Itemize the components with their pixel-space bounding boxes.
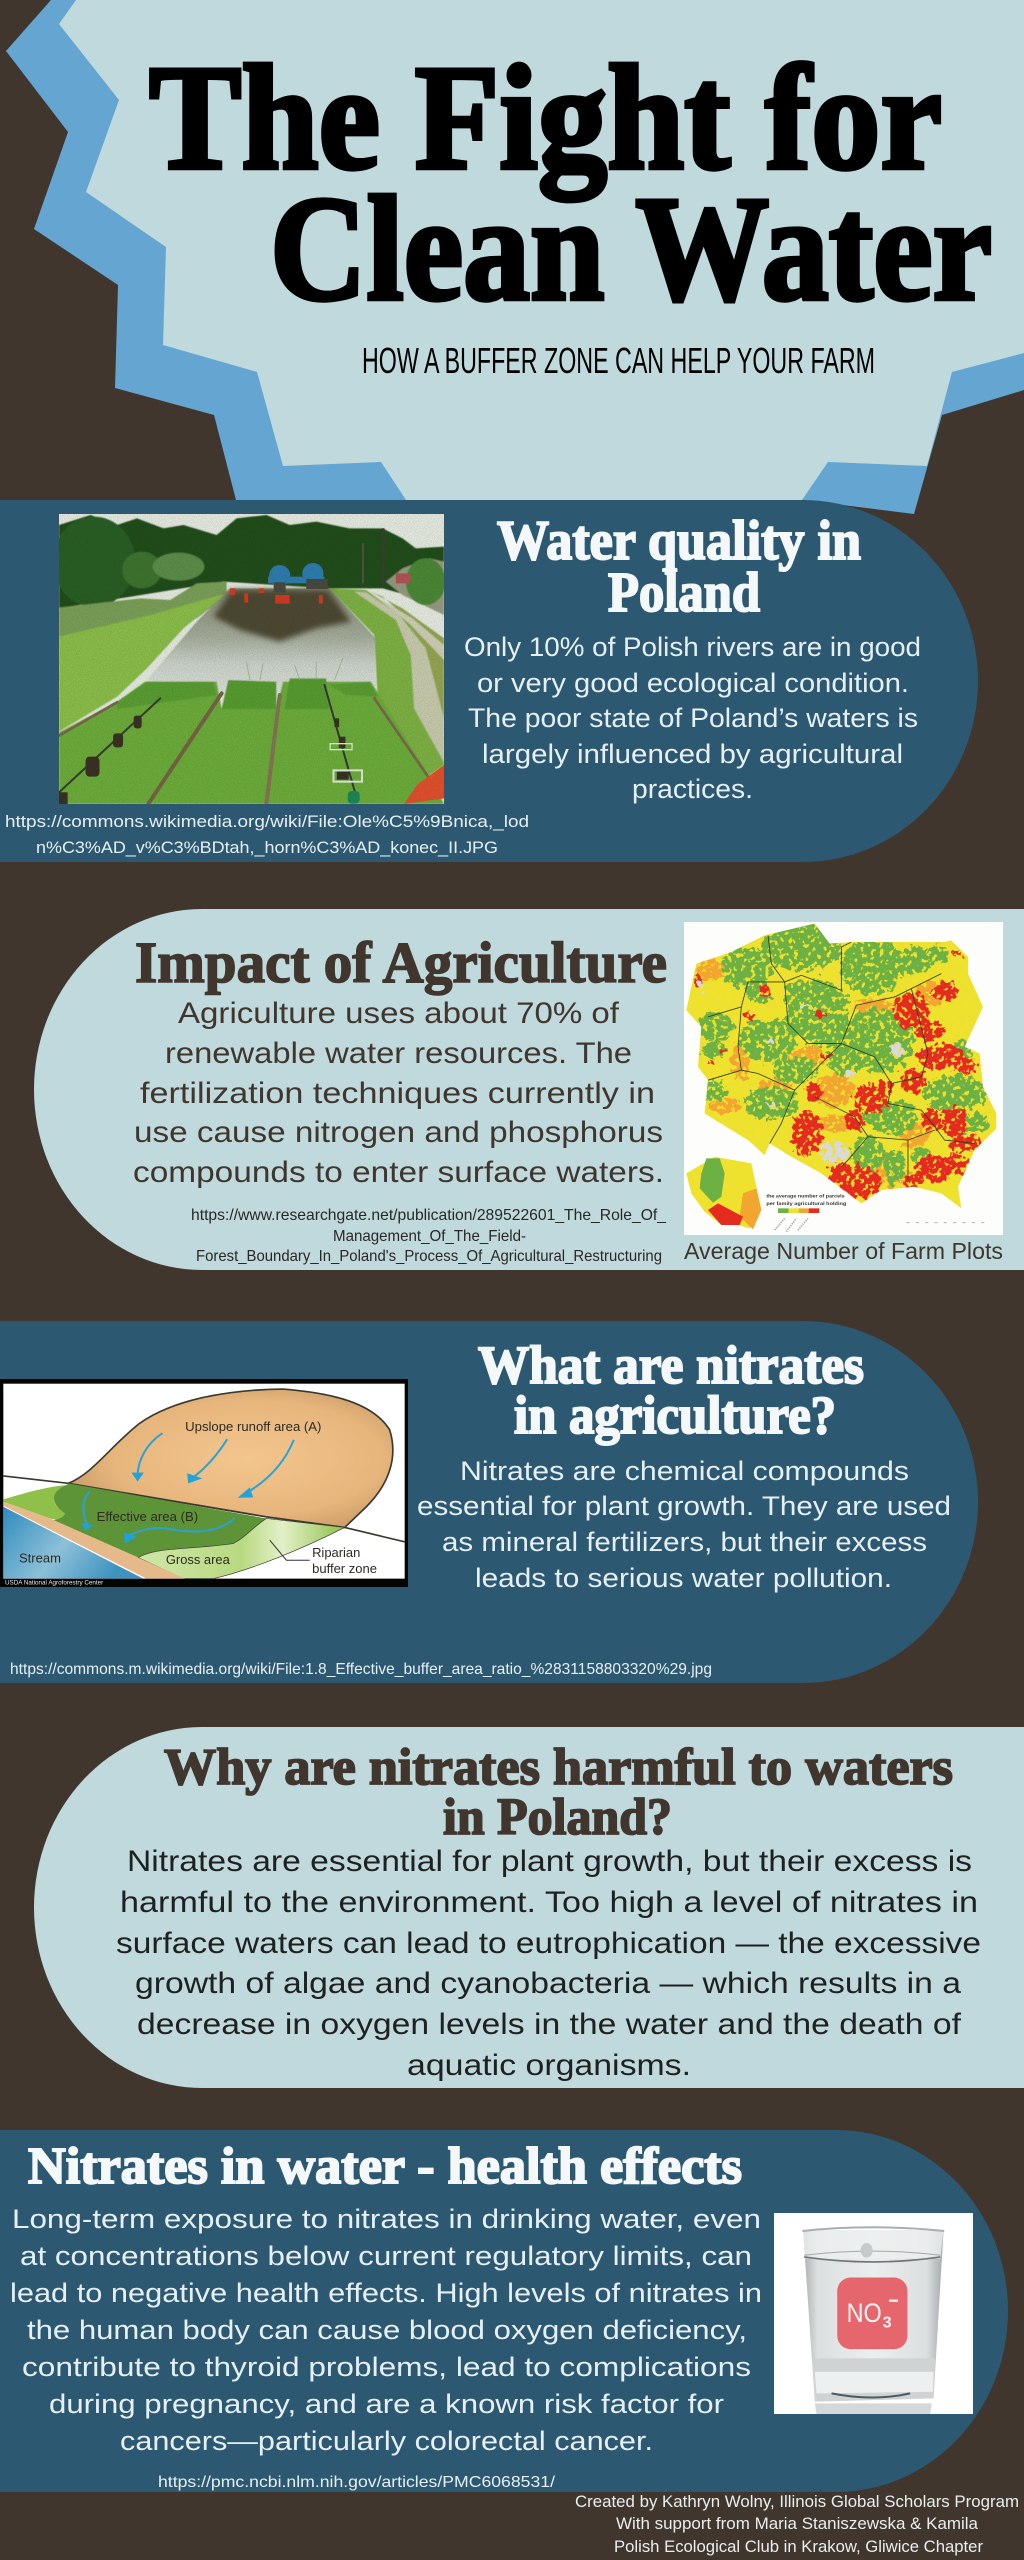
heading: in agriculture? (514, 1385, 836, 1445)
body text: contribute to thyroid problems, lead to complications (22, 2352, 751, 2382)
heading (164, 1739, 953, 1846)
source url: Forest_Boundary_In_Poland's_Process_Of_Agricultural_Restructuring (196, 1248, 662, 1265)
body text (116, 1845, 981, 2082)
panel: health effects (0, 2130, 1008, 2492)
body text: fertilization techniques currently in (140, 1077, 655, 1110)
source url: Management_Of_The_Field- (333, 1228, 526, 1245)
title (149, 35, 992, 332)
map legend (766, 1193, 985, 1232)
panel: why are nitrates harmful (34, 1727, 1024, 2088)
body text: the human body can cause blood oxygen deficiency, (27, 2315, 747, 2345)
diagram: buffer zone: Gross area (166, 1552, 231, 1567)
body text: practices. (632, 774, 753, 804)
diagram: buffer zone: buffer zone (312, 1561, 377, 1576)
body text: use cause nitrogen and phosphorus (134, 1116, 663, 1149)
source url: https://commons.m.wikimedia.org/wiki/File:1.8_Effective_buffer_area_ratio_%2831158803320%29.jpg (10, 1661, 712, 1678)
body text: harmful to the environment. Too high a level of nitrates in (120, 1886, 978, 1919)
body text: The poor state of Poland’s waters is (468, 703, 918, 733)
heading: Nitrates in water - health effects (28, 2138, 742, 2195)
body text: surface waters can lead to eutrophication — the excessive (116, 1927, 981, 1960)
diagram: buffer zone: Effective area (B) (97, 1509, 198, 1524)
diagram: buffer zone: Riparian (312, 1545, 360, 1560)
body text: compounds to enter surface waters. (133, 1156, 664, 1189)
heading: Water quality in (497, 510, 861, 572)
body text: decrease in oxygen levels in the water and the death of (137, 2008, 962, 2041)
heading (478, 1335, 864, 1445)
footer credits: Polish Ecological Club in Krakow, Gliwice Chapter (614, 2537, 983, 2556)
body text: Only 10% of Polish rivers are in good (464, 632, 921, 662)
source url: n%C3%AD_v%C3%BDtah,_horn%C3%AD_konec_II.JPG (36, 838, 498, 857)
body text: lead to negative health effects. High levels of nitrates in (10, 2278, 762, 2308)
source url (191, 1207, 667, 1265)
inset map (686, 1157, 761, 1229)
body text: at concentrations below current regulatory limits, can (20, 2241, 752, 2271)
panel: water quality in Poland (0, 500, 978, 862)
body text (10, 2204, 762, 2456)
glass of water image: NO (847, 2298, 882, 2328)
map of Poland (684, 922, 1003, 1235)
map legend: per family agricultural holding (766, 1201, 847, 1206)
diagram: buffer zone: Stream (19, 1551, 61, 1566)
panel: what are nitrates (0, 1321, 978, 1683)
footer credits: With support from Maria Staniszewska & Kamila (616, 2514, 979, 2533)
body text: Long-term exposure to nitrates in drinking water, even (12, 2204, 761, 2234)
image: canal photo (59, 514, 444, 804)
map legend: the average number of parcels (766, 1193, 845, 1198)
body text: or very good ecological condition. (477, 668, 909, 698)
diagram: buffer zone: USDA National Agroforestry Center (5, 1581, 103, 1587)
diagram: buffer zone: Upslope runoff area (A) (185, 1419, 321, 1434)
body text (133, 997, 664, 1189)
body text: aquatic organisms. (407, 2049, 691, 2082)
heading (497, 510, 861, 624)
heading: Poland (608, 562, 760, 624)
heading: What are nitrates (478, 1335, 864, 1395)
heading: in Poland? (443, 1789, 672, 1846)
header: blue jagged shape (6, 0, 1024, 514)
title: The Fight for (149, 35, 942, 201)
body text: Agriculture uses about 70% of (178, 997, 620, 1030)
body text: largely influenced by agricultural (482, 739, 903, 769)
glass of water image (774, 2213, 973, 2414)
source url: https://pmc.ncbi.nlm.nih.gov/articles/PMC6068531/ (158, 2474, 556, 2491)
body text: Nitrates are chemical compounds (460, 1456, 909, 1486)
heading: Why are nitrates harmful to waters (164, 1739, 953, 1796)
body text: Nitrates are essential for plant growth, but their excess is (127, 1845, 972, 1878)
footer credits (575, 2492, 1019, 2556)
body text: essential for plant growth. They are used (417, 1491, 951, 1521)
source url: https://www.researchgate.net/publication/289522601_The_Role_Of_ (191, 1207, 667, 1224)
source url: https://commons.wikimedia.org/wiki/File:Ole%C5%9Bnica,_lod (5, 812, 529, 831)
body text: leads to serious water pollution. (475, 1563, 892, 1593)
map caption: Average Number of Farm Plots (684, 1238, 1003, 1264)
diagram: buffer zone (0, 1379, 408, 1587)
header: pale jagged shape (59, 0, 1024, 500)
body text: renewable water resources. The (165, 1037, 632, 1070)
footer credits: Created by Kathryn Wolny, Illinois Global Scholars Program (575, 2492, 1019, 2511)
body text: as mineral fertilizers, but their excess (442, 1527, 927, 1557)
body text: growth of algae and cyanobacteria — which results in a (135, 1967, 961, 2000)
source url (5, 812, 529, 857)
glass of water image: 3 (883, 2315, 892, 2331)
heading: Impact of Agriculture (135, 930, 667, 995)
body text (417, 1456, 951, 1593)
panel: impact of agriculture (34, 909, 1024, 1270)
body text: cancers—particularly colorectal cancer. (120, 2426, 653, 2456)
body text: during pregnancy, and are a known risk factor for (49, 2389, 724, 2419)
body text (464, 632, 921, 804)
